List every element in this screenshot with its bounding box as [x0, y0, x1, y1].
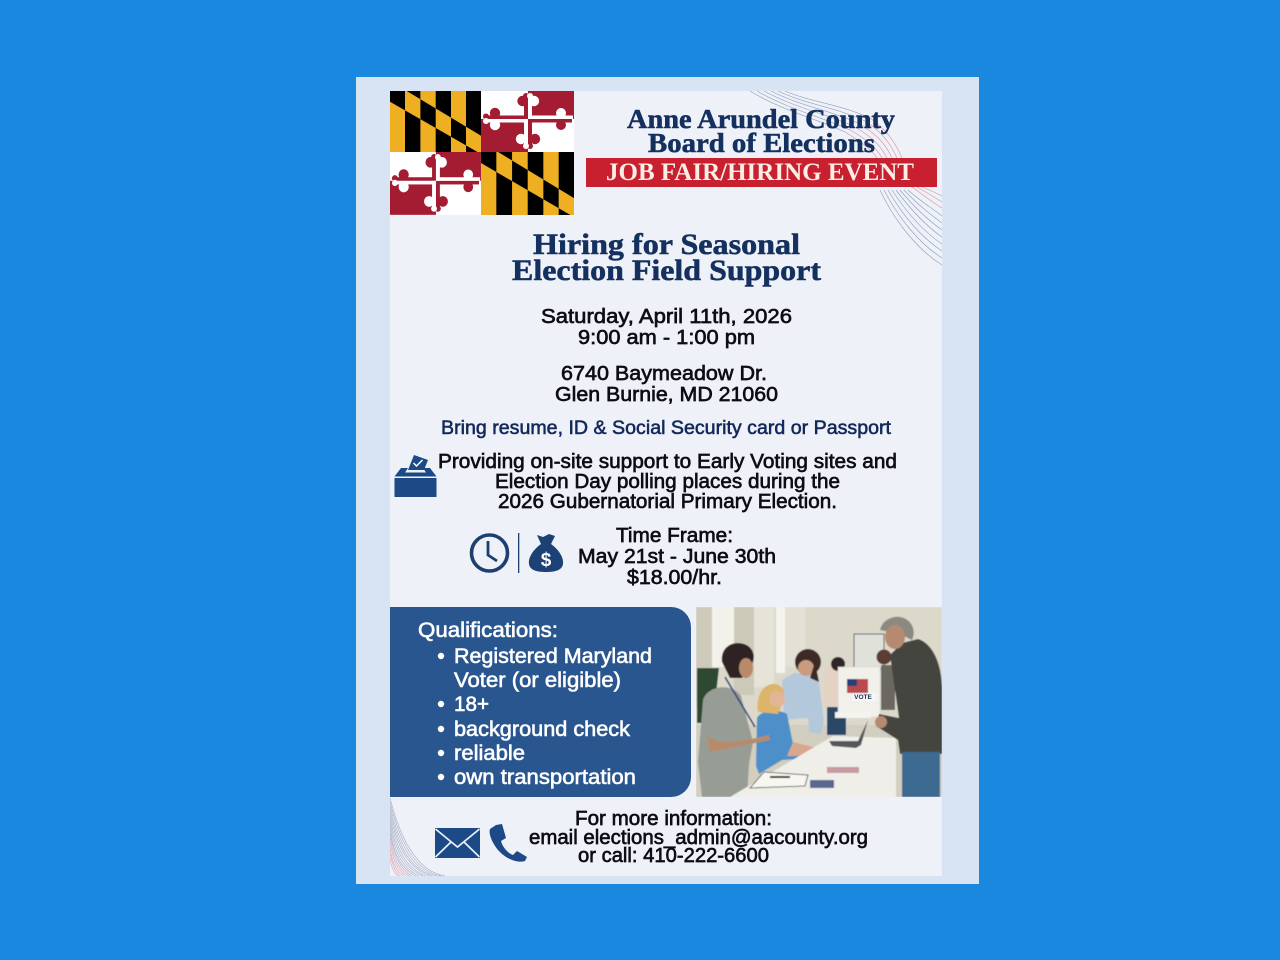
address [555, 362, 778, 406]
description: Providing on-site support to Early Voting sites and [438, 450, 897, 473]
icon: clock [472, 535, 508, 571]
description: 2026 Gubernatorial Primary Election. [498, 490, 837, 513]
main heading [512, 228, 821, 287]
time frame and pay: May 21st - June 30th [578, 545, 776, 568]
seated poll worker [756, 710, 800, 774]
photo: poll workers at a voting table [696, 607, 942, 797]
flag quadrant: Calvert top left [390, 91, 481, 152]
flyer border [356, 77, 979, 884]
left poll worker [698, 687, 753, 797]
red banner [586, 158, 937, 187]
qualifications list: 18+ [454, 693, 489, 716]
ballot booth [838, 667, 880, 717]
panel: qualifications [390, 607, 691, 797]
header organisation name [627, 104, 896, 158]
standing poll worker [782, 673, 824, 734]
qualifications list: own transportation [454, 766, 636, 789]
icon: phone [490, 824, 527, 862]
date and time: Saturday, April 11th, 2026 [541, 305, 792, 328]
contact information: or call: 410-222-6600 [578, 844, 769, 867]
qualifications list: Voter (or eligible) [454, 669, 621, 692]
contact information: For more information: [575, 807, 772, 830]
flag quadrant: Crossland top right [481, 91, 574, 152]
icon: envelope [435, 828, 480, 858]
Maryland flag [390, 91, 574, 215]
flag quadrant: Crossland bottom left [390, 152, 481, 215]
time frame and pay: Time Frame: [616, 524, 733, 547]
time frame and pay: $18.00/hr. [627, 566, 722, 589]
address: 6740 Baymeadow Dr. [561, 362, 767, 385]
qualifications list [438, 645, 652, 789]
contact information [529, 807, 868, 867]
banner text: JOB FAIR/HIRING EVENT [606, 159, 914, 186]
photo label: vote: VOTE [854, 694, 873, 701]
table [730, 736, 896, 797]
icon: money bag: $ [541, 550, 552, 571]
flyer paper [390, 91, 942, 876]
qualifications list: Registered Maryland [454, 645, 652, 668]
qualifications list: reliable [454, 742, 525, 765]
date and time [541, 305, 792, 349]
description: Election Day polling places during the [495, 470, 840, 493]
icon: money bag [529, 534, 563, 572]
heading line: Anne Arundel County: Anne Arundel County [627, 104, 896, 134]
flag quadrant: Calvert bottom right [481, 152, 574, 215]
what to bring: Bring resume, ID & Social Security card or Passport [441, 417, 892, 439]
heading line 1: Hiring for Seasonal [533, 228, 800, 261]
icon: ballot box [394, 455, 436, 497]
background woman [830, 666, 836, 672]
heading line: Board of Elections: Board of Elections [648, 128, 875, 158]
heading line 2: Election Field Support [512, 254, 821, 287]
time frame and pay [578, 524, 776, 589]
contact information: email elections_admin@aacounty.org [529, 826, 868, 849]
divider [518, 533, 519, 573]
voter [876, 639, 942, 754]
address: Glen Burnie, MD 21060 [555, 383, 778, 406]
qualifications heading: Qualifications: [418, 619, 558, 642]
date and time: 9:00 am - 1:00 pm [578, 326, 755, 349]
description [438, 450, 897, 513]
qualifications list: background check [454, 718, 631, 741]
background man [881, 665, 895, 710]
